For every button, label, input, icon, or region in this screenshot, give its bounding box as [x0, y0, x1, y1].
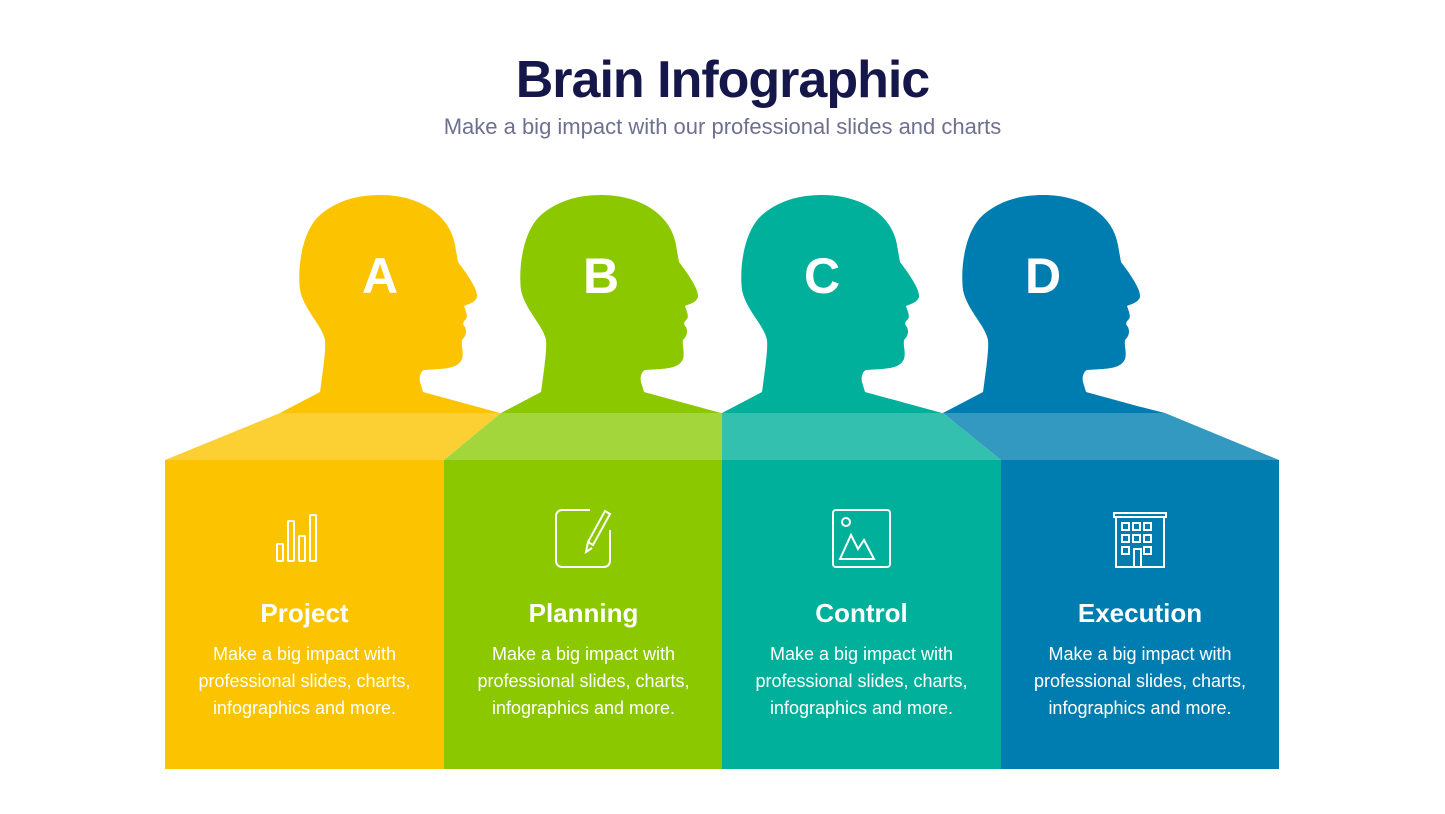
text: Project: Project — [260, 598, 349, 628]
icon: image — [833, 510, 890, 567]
text: Project: professional slides, charts, — [198, 671, 411, 691]
text: Control: Make a big impact with — [770, 644, 953, 664]
icon: bar chart — [277, 515, 316, 561]
text: Project — [198, 598, 411, 718]
text: Control: Control — [815, 598, 908, 628]
column B — [444, 195, 723, 769]
title: Brain Infographic — [516, 51, 929, 109]
column A — [165, 195, 501, 769]
column C — [722, 195, 1002, 769]
column D — [943, 195, 1279, 769]
column B: B — [583, 248, 619, 304]
text: Planning: professional slides, charts, — [477, 671, 690, 691]
text: Control — [755, 598, 968, 718]
icon: building — [1114, 513, 1166, 567]
subtitle: Make a big impact with our professional slides and charts — [444, 114, 1001, 139]
text: Execution — [1034, 598, 1246, 718]
column D: D — [1025, 248, 1061, 304]
text: Planning: Make a big impact with — [492, 644, 675, 664]
text: Planning — [477, 598, 690, 718]
text: Control: infographics and more. — [770, 698, 953, 718]
text: Execution: Make a big impact with — [1048, 644, 1232, 664]
text: Planning: infographics and more. — [492, 698, 675, 718]
text: Execution: Execution — [1078, 598, 1202, 628]
text: Planning: Planning — [529, 598, 638, 628]
column A: A — [362, 248, 398, 304]
text: Project: infographics and more. — [213, 698, 396, 718]
column C: C — [804, 248, 840, 304]
icon: pencil — [556, 510, 610, 567]
text: Control: professional slides, charts, — [755, 671, 968, 691]
text: Project: Make a big impact with — [213, 644, 396, 664]
text: Execution: infographics and more. — [1048, 698, 1232, 718]
text: Execution: professional slides, charts, — [1034, 671, 1246, 691]
